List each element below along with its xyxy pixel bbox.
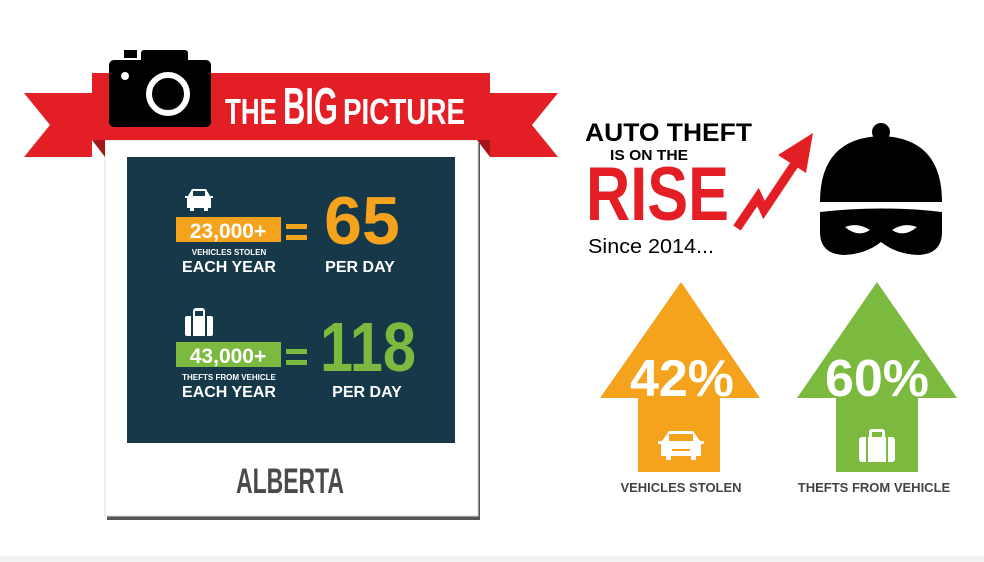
icon: suitcase small xyxy=(185,308,213,336)
arrow: thefts from vehicle 60%: 60% xyxy=(825,350,929,408)
arrow: thefts from vehicle 60% xyxy=(797,282,957,495)
title: BIG xyxy=(283,78,338,136)
stat: 23,000+ xyxy=(176,183,400,276)
heading: auto theft is on the rise: AUTO THEFT xyxy=(585,119,752,147)
icon: car xyxy=(658,431,704,460)
heading: auto theft is on the rise: RISE xyxy=(586,152,729,237)
heading: auto theft is on the rise xyxy=(585,119,752,258)
arrow: vehicles stolen 42%: VEHICLES STOLEN xyxy=(620,480,742,495)
label: ALBERTA: ALBERTA xyxy=(236,462,344,501)
stat: 23,000+: EACH YEAR xyxy=(182,259,276,276)
heading: auto theft is on the rise: Since 2014... xyxy=(588,236,714,258)
ribbon banner xyxy=(24,73,558,157)
stat: 23,000+: PER DAY xyxy=(325,259,395,276)
icon: camera xyxy=(109,50,211,127)
polaroid frame xyxy=(105,140,480,520)
title: PICTURE xyxy=(343,91,465,132)
arrow: zigzag rising xyxy=(737,133,813,228)
heading: auto theft is on the rise: IS ON THE xyxy=(610,147,688,164)
title xyxy=(225,78,465,136)
arrow: vehicles stolen 42% xyxy=(600,282,760,495)
arrow: thefts from vehicle 60%: THEFTS FROM VEHICLE xyxy=(798,480,951,495)
stat: 43,000+: PER DAY xyxy=(332,384,402,401)
stat: 43,000+: 118 xyxy=(320,308,416,386)
arrow: vehicles stolen 42%: 42% xyxy=(630,350,734,408)
icon: thief xyxy=(820,123,942,255)
icon: suitcase xyxy=(859,429,895,462)
stat: 43,000+: EACH YEAR xyxy=(182,384,276,401)
stat: 23,000+: 23,000+ xyxy=(190,220,266,243)
stat: 23,000+: VEHICLES STOLEN xyxy=(192,248,266,257)
stat: 43,000+: THEFTS FROM VEHICLE xyxy=(182,373,277,382)
stat: 23,000+: 65 xyxy=(324,183,400,259)
title: THE xyxy=(225,91,277,132)
dark panel xyxy=(127,157,455,443)
stat: 43,000+ xyxy=(176,308,416,401)
stat: 43,000+: 43,000+ xyxy=(190,345,266,368)
icon: car small xyxy=(185,189,213,211)
